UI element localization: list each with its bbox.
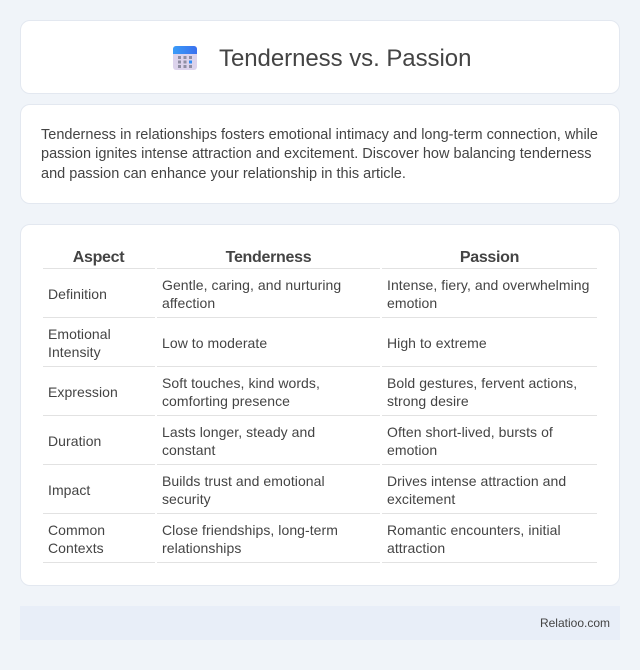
comparison table: emotion	[387, 442, 437, 458]
row: impact: Impact	[48, 482, 90, 498]
intro text: passion ignites intense attraction and excitement. Discover how balancing tenderness	[41, 146, 592, 162]
intro text: and passion can enhance your relationship in this article.	[41, 166, 406, 182]
comparison table: Intensity	[48, 344, 101, 360]
title: Tenderness vs. Passion	[219, 45, 471, 72]
comparison table: affection	[162, 295, 215, 311]
comparison table: emotion	[387, 295, 437, 311]
comparison table: Close friendships, long-term	[162, 522, 338, 538]
intro text	[41, 127, 598, 182]
row: common contexts: Common	[48, 522, 105, 538]
comparison table: attraction	[387, 540, 445, 556]
comparison table: Lasts longer, steady and	[162, 424, 315, 440]
comparison table: High to extreme	[387, 335, 487, 351]
row: expression: Expression	[48, 384, 118, 400]
comparison table: constant	[162, 442, 215, 458]
comparison table: Soft touches, kind words,	[162, 375, 320, 391]
comparison table: Intense, fiery, and overwhelming	[387, 277, 589, 293]
intro text: Tenderness in relationships fosters emotional intimacy and long-term connection, while	[41, 127, 598, 143]
footer credit: Relatioo.com	[540, 616, 610, 630]
comparison table: Contexts	[48, 540, 104, 556]
comparison table: relationships	[162, 540, 241, 556]
comparison table: Often short-lived, bursts of	[387, 424, 553, 440]
comparison table: Low to moderate	[162, 335, 267, 351]
header: passion: Passion	[460, 249, 519, 266]
row: emotional intensity: Emotional	[48, 326, 111, 342]
comparison table: security	[162, 491, 211, 507]
intro panel	[20, 104, 620, 204]
comparison table: strong desire	[387, 393, 469, 409]
comparison table: comforting presence	[162, 393, 290, 409]
footer bar	[20, 606, 620, 640]
header: tenderness: Tenderness	[226, 249, 311, 266]
comparison table: Romantic encounters, initial	[387, 522, 561, 538]
comparison table: Drives intense attraction and	[387, 473, 566, 489]
row: duration: Duration	[48, 433, 101, 449]
icon: calendar	[173, 46, 197, 70]
row: definition: Definition	[48, 286, 107, 302]
comparison table: Builds trust and emotional	[162, 473, 325, 489]
header panel	[20, 20, 620, 94]
comparison table: Bold gestures, fervent actions,	[387, 375, 577, 391]
header: aspect: Aspect	[73, 249, 124, 266]
comparison table: Gentle, caring, and nurturing	[162, 277, 341, 293]
table panel	[20, 224, 620, 586]
comparison table: excitement	[387, 491, 455, 507]
